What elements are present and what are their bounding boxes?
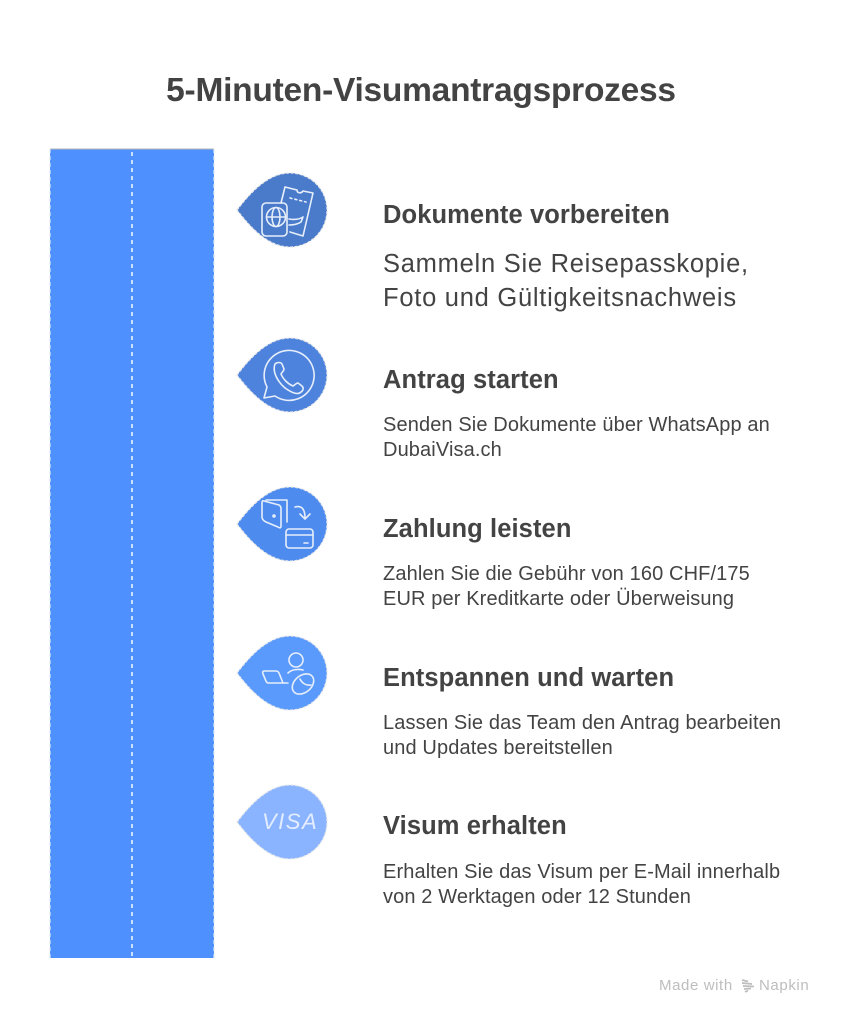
text: Zahlung leisten description [383,563,750,610]
text: Antrag starten description: DubaiVisa.ch [383,439,502,461]
text: Visum erhalten description [383,861,780,908]
heading: Visum erhalten: Visum erhalten [383,812,567,840]
text: Entspannen und warten description [383,712,781,759]
text: Dokumente vorbereiten description: Foto und Gültigkeitsnachweis [383,284,737,312]
heading: Antrag starten: Antrag starten [383,366,559,394]
text: Zahlung leisten description: Zahlen Sie die Gebühr von 160 CHF/175 [383,563,750,585]
heading: Entspannen und warten: Entspannen und warten [383,664,674,692]
heading: Zahlung leisten: Zahlung leisten [383,515,572,543]
text: Dokumente vorbereiten description [383,250,749,312]
text: Zahlung leisten description: EUR per Kreditkarte oder Überweisung [383,588,734,610]
text: Entspannen und warten description: Lassen Sie das Team den Antrag bearbeiten [383,712,781,734]
text: Visum erhalten description: von 2 Werktagen oder 12 Stunden [383,886,691,908]
text: Antrag starten description: Senden Sie Dokumente über WhatsApp an [383,414,770,436]
footer: Made with Napkin: Napkin [759,977,809,994]
heading: Dokumente vorbereiten: Dokumente vorbereiten [383,201,670,229]
text: Visum erhalten description: Erhalten Sie das Visum per E-Mail innerhalb [383,861,780,883]
footer: Made with Napkin [659,977,809,994]
icon: visa teardrop: VISA [262,809,318,834]
text: Dokumente vorbereiten description: Sammeln Sie Reisepasskopie, [383,250,749,278]
text: Antrag starten description [383,414,770,461]
text: Entspannen und warten description: und Updates bereitstellen [383,737,613,759]
footer: Made with Napkin: Made with [659,977,733,994]
title: 5-Minuten-Visumantragsprozess [166,72,676,109]
